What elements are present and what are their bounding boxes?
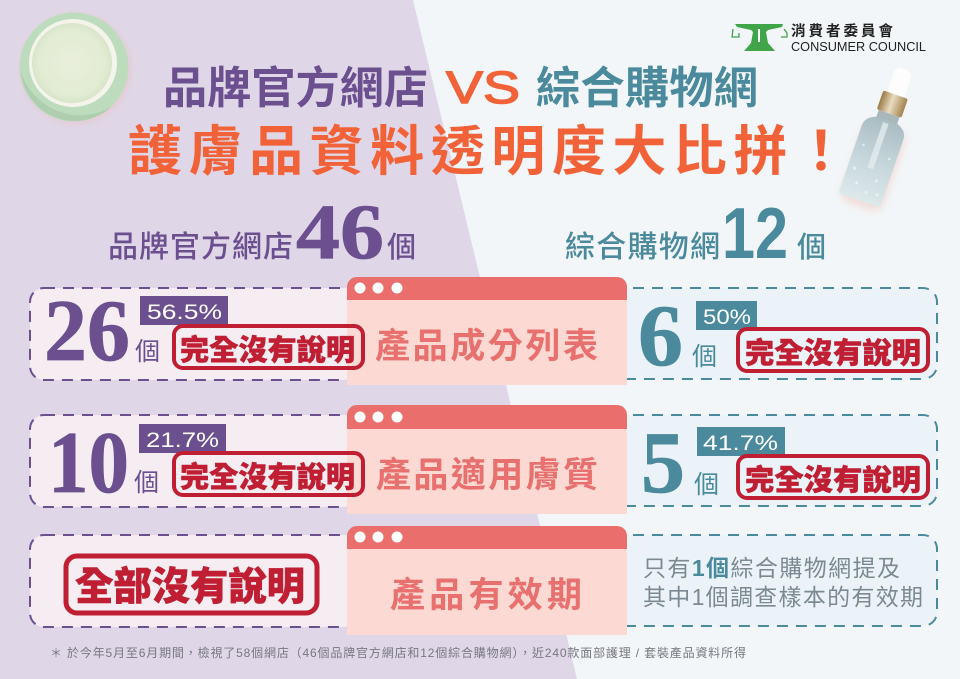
- note text: [643, 555, 923, 610]
- label: 產品成分列表: [375, 327, 598, 366]
- number 26: 26: [44, 283, 130, 380]
- badge 56.5%: 56.5%: [147, 301, 222, 324]
- unit: 個: [135, 338, 160, 366]
- panel: row 2 left: [30, 415, 370, 512]
- heading: brand stores 46: [108, 188, 416, 275]
- background: left purple area: [0, 0, 577, 679]
- note text: 只有1個綜合購物網提及: [643, 555, 900, 581]
- title line 1: [163, 62, 758, 113]
- icon: serum bottle: [837, 62, 927, 213]
- number 46: 46: [296, 188, 384, 275]
- title: marketplaces: 綜合購物網: [536, 64, 758, 113]
- note text: 其中1個調查樣本的有效期: [643, 584, 923, 610]
- logo text English: CONSUMER COUNCIL: [791, 39, 926, 54]
- panel: row 3 left: [30, 535, 370, 627]
- panel: row 2 right: [600, 415, 937, 512]
- unit: 個: [692, 343, 717, 371]
- stamp: row 2 left: 完全沒有說明: [180, 460, 355, 494]
- panel: row 3 right: [600, 535, 937, 626]
- logo text Chinese: 消費者委員會: [791, 22, 894, 40]
- badge 21.7%: [139, 424, 226, 453]
- panel: row 1 left: [30, 283, 370, 380]
- stamp: row 1 left: 完全沒有說明: [180, 333, 355, 367]
- number 5: 5: [641, 415, 685, 512]
- badge 41.7%: [697, 427, 785, 456]
- label: 產品適用膚質: [376, 456, 598, 495]
- icon: cream jar: [20, 12, 130, 123]
- stamp: 全部沒有說明: [75, 566, 305, 609]
- heading: marketplaces 12: [565, 194, 826, 274]
- unit: 個: [134, 469, 159, 497]
- heading: marketplaces 12: 綜合購物網: [565, 231, 720, 264]
- number 12: 12: [722, 194, 788, 274]
- number 6: 6: [638, 288, 683, 385]
- badge 50%: [696, 301, 757, 330]
- title line 2: 護膚品資料透明度大比拼！: [128, 122, 848, 182]
- title: brand stores: 品牌官方網店: [163, 64, 428, 113]
- icon: green scale: [732, 24, 787, 51]
- badge 41.7%: 41.7%: [703, 432, 778, 455]
- stamp: [738, 329, 928, 371]
- label: 產品有效期: [390, 576, 582, 615]
- logo: Consumer Council: [732, 22, 926, 54]
- window: skin type: [347, 405, 627, 514]
- badge 21.7%: 21.7%: [146, 429, 219, 452]
- stamp: [738, 456, 928, 498]
- stamp: 完全沒有說明: [745, 336, 921, 370]
- window: ingredients: [347, 277, 627, 385]
- unit: 個: [694, 471, 719, 499]
- title: VS: VS: [446, 62, 520, 113]
- badge 50%: 50%: [703, 306, 751, 329]
- badge 56.5%: [140, 296, 228, 325]
- number 10: 10: [48, 415, 129, 512]
- heading: brand stores 46: 品牌官方網店: [108, 231, 293, 264]
- footnote: ＊ 於今年5月至6月期間，檢視了58個網店（46個品牌官方網店和12個綜合購物網），近240款面部護理 / 套裝產品資料所得: [50, 645, 746, 660]
- window: expiry date: [347, 526, 627, 635]
- stamp: 完全沒有說明: [745, 463, 921, 497]
- unit: 個: [387, 231, 416, 264]
- unit: 個: [797, 231, 826, 264]
- panel: row 1 right: [600, 288, 937, 385]
